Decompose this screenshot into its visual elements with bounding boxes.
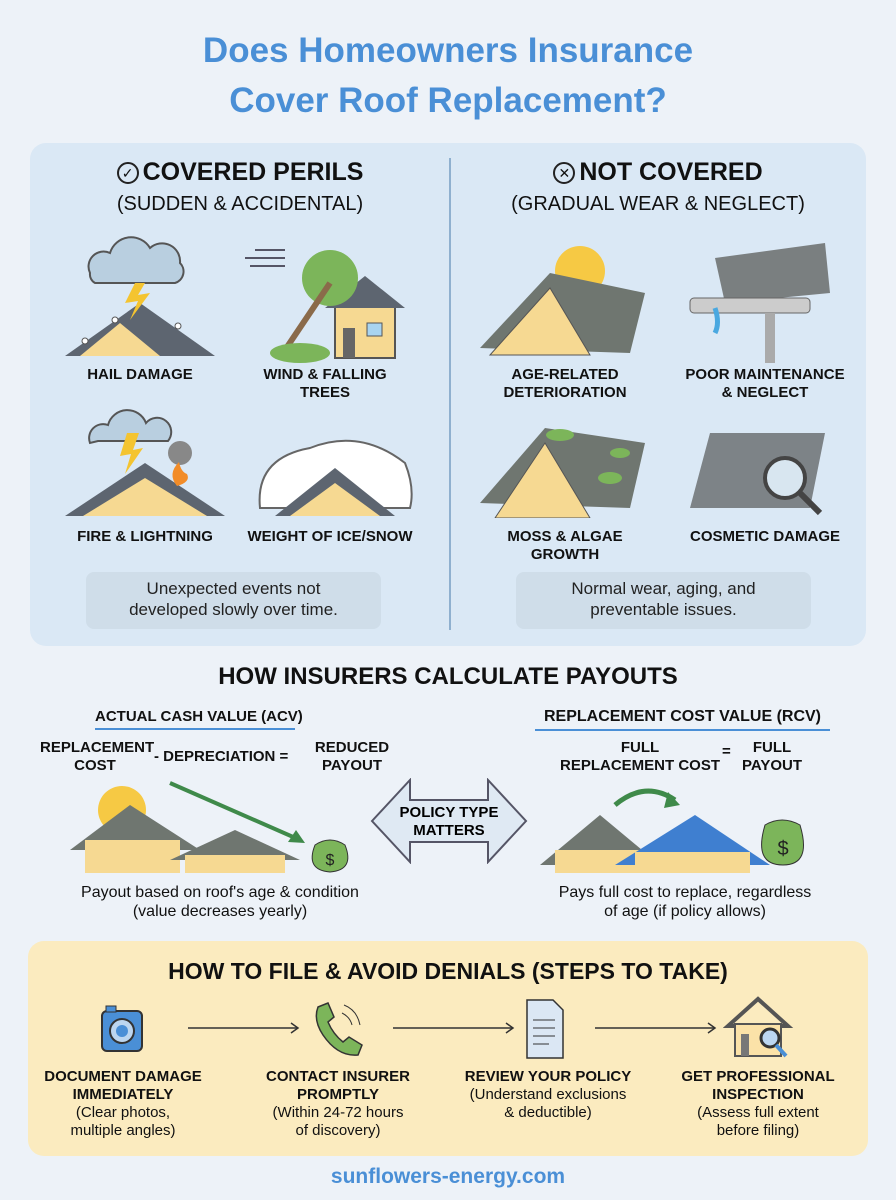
step 1 text: (Clear photos, bbox=[76, 1104, 170, 1121]
step 4 text bbox=[681, 1068, 835, 1139]
title: Cover Roof Replacement? bbox=[229, 81, 667, 120]
equation: RCV: PAYOUT bbox=[742, 757, 802, 774]
illustration: ACV houses bbox=[70, 781, 348, 873]
illustration: RCV houses: $ bbox=[777, 838, 789, 860]
label: age: DETERIORATION bbox=[503, 384, 627, 401]
title: Does Homeowners Insurance bbox=[203, 31, 693, 70]
equation: RCV: FULL bbox=[621, 739, 659, 756]
step 2 text: of discovery) bbox=[295, 1122, 381, 1139]
caption: RCV bbox=[559, 884, 811, 920]
label: age bbox=[503, 366, 627, 401]
icon: age deterioration bbox=[480, 246, 645, 356]
panel: coverage bbox=[30, 143, 866, 646]
equation: RCV: = bbox=[722, 743, 731, 760]
caption: ACV bbox=[81, 884, 359, 920]
subheading: ACV: ACTUAL CASH VALUE (ACV) bbox=[95, 708, 303, 725]
label: hail damage: HAIL DAMAGE bbox=[87, 366, 193, 383]
caption: covered: developed slowly over time. bbox=[129, 600, 338, 619]
footer: sunflowers-energy.com bbox=[331, 1165, 565, 1188]
equation: ACV: PAYOUT bbox=[322, 757, 382, 774]
caption: covered: Unexpected events not bbox=[147, 579, 320, 598]
equation: ACV: COST bbox=[74, 757, 116, 774]
label: fire: FIRE & LIGHTNING bbox=[77, 528, 213, 545]
heading: covered perils: (SUDDEN & ACCIDENTAL) bbox=[117, 193, 363, 215]
step 1 text: multiple angles) bbox=[70, 1122, 176, 1139]
step 1 text: DOCUMENT DAMAGE bbox=[44, 1068, 202, 1085]
heading: payouts: HOW INSURERS CALCULATE PAYOUTS bbox=[218, 663, 678, 690]
title bbox=[203, 31, 693, 120]
icon: document bbox=[526, 999, 564, 1059]
icon: cosmetic bbox=[690, 433, 825, 516]
caption: not covered bbox=[516, 572, 811, 629]
illustration: RCV houses bbox=[540, 788, 804, 873]
subheading: RCV: REPLACEMENT COST VALUE (RCV) bbox=[544, 708, 821, 725]
icon: moss bbox=[480, 428, 645, 518]
label: wind: WIND & FALLING bbox=[263, 366, 387, 383]
label: wind bbox=[263, 366, 387, 401]
label: maintenance: POOR MAINTENANCE bbox=[685, 366, 845, 383]
step 4 text: GET PROFESSIONAL bbox=[681, 1068, 835, 1085]
label: moss: MOSS & ALGAE bbox=[507, 528, 623, 545]
caption: RCV: Pays full cost to replace, regardless bbox=[559, 884, 811, 901]
step 2 text: (Within 24-72 hours bbox=[273, 1104, 403, 1121]
heading: not covered bbox=[511, 158, 805, 215]
icon: maintenance bbox=[690, 243, 830, 363]
arrow: policy type matters bbox=[370, 778, 528, 864]
step 1 text: IMMEDIATELY bbox=[73, 1086, 173, 1103]
icon: wind & trees bbox=[245, 249, 405, 363]
arrow 2 bbox=[393, 1022, 514, 1034]
step 4 text: INSPECTION bbox=[712, 1086, 804, 1103]
equation: RCV: FULL bbox=[753, 739, 791, 756]
icon: house inspection bbox=[723, 996, 794, 1058]
arrow: policy type matters: POLICY TYPE bbox=[400, 804, 498, 821]
caption: ACV: (value decreases yearly) bbox=[133, 903, 307, 920]
icon: phone bbox=[316, 1002, 363, 1056]
subheading: RCV bbox=[535, 708, 830, 731]
label: maintenance: & NEGLECT bbox=[722, 384, 808, 401]
heading: covered perils: ✓ bbox=[122, 165, 133, 181]
equation: ACV: - DEPRECIATION = bbox=[154, 748, 288, 765]
step 3 text: (Understand exclusions bbox=[470, 1086, 626, 1103]
arrow 3 bbox=[595, 1022, 716, 1034]
heading: not covered: (GRADUAL WEAR & NEGLECT) bbox=[511, 193, 805, 215]
step 1 text bbox=[44, 1068, 202, 1139]
caption: not covered: Normal wear, aging, and bbox=[571, 579, 756, 598]
step 4 text: (Assess full extent bbox=[697, 1104, 819, 1121]
heading: covered perils: COVERED PERILS bbox=[143, 158, 363, 186]
icon: fire bbox=[65, 409, 225, 516]
illustration: ACV houses: $ bbox=[326, 852, 335, 869]
heading: not covered: NOT COVERED bbox=[579, 158, 763, 186]
equation: ACV: REPLACEMENT bbox=[40, 739, 154, 756]
arrow 1 bbox=[188, 1022, 300, 1034]
step 2 text: CONTACT INSURER bbox=[266, 1068, 410, 1085]
label: moss: GROWTH bbox=[531, 546, 599, 563]
label: cosmetic: COSMETIC DAMAGE bbox=[690, 528, 840, 545]
step 4 text: before filing) bbox=[717, 1122, 799, 1139]
caption: RCV: of age (if policy allows) bbox=[604, 903, 766, 920]
step 2 text bbox=[266, 1068, 410, 1139]
heading: steps: HOW TO FILE & AVOID DENIALS (STEPS TO TAKE) bbox=[168, 958, 728, 984]
label: ice: WEIGHT OF ICE/SNOW bbox=[248, 528, 412, 545]
step 3 text: & deductible) bbox=[504, 1104, 592, 1121]
step 2 text: PROMPTLY bbox=[297, 1086, 379, 1103]
equation: ACV bbox=[40, 739, 389, 774]
label: wind: TREES bbox=[300, 384, 350, 401]
step 3 text: REVIEW YOUR POLICY bbox=[465, 1068, 631, 1085]
caption: ACV: Payout based on roof's age & condition bbox=[81, 884, 359, 901]
heading: covered perils bbox=[117, 158, 363, 215]
label: maintenance bbox=[685, 366, 845, 401]
caption: not covered: preventable issues. bbox=[590, 600, 737, 619]
panel: steps bbox=[28, 941, 868, 1156]
label: moss bbox=[507, 528, 623, 563]
heading: not covered: ✕ bbox=[558, 165, 570, 181]
step 3 text bbox=[465, 1068, 631, 1121]
icon: ice snow bbox=[258, 440, 413, 516]
caption: covered bbox=[86, 572, 381, 629]
equation: ACV: REDUCED bbox=[315, 739, 389, 756]
icon: camera bbox=[101, 1006, 143, 1052]
equation: RCV: REPLACEMENT COST bbox=[560, 757, 720, 774]
icon: hail damage bbox=[65, 236, 215, 356]
divider bbox=[449, 158, 451, 630]
label: age: AGE-RELATED bbox=[511, 366, 619, 383]
equation: RCV bbox=[560, 739, 802, 774]
arrow: policy type matters: MATTERS bbox=[413, 822, 485, 839]
